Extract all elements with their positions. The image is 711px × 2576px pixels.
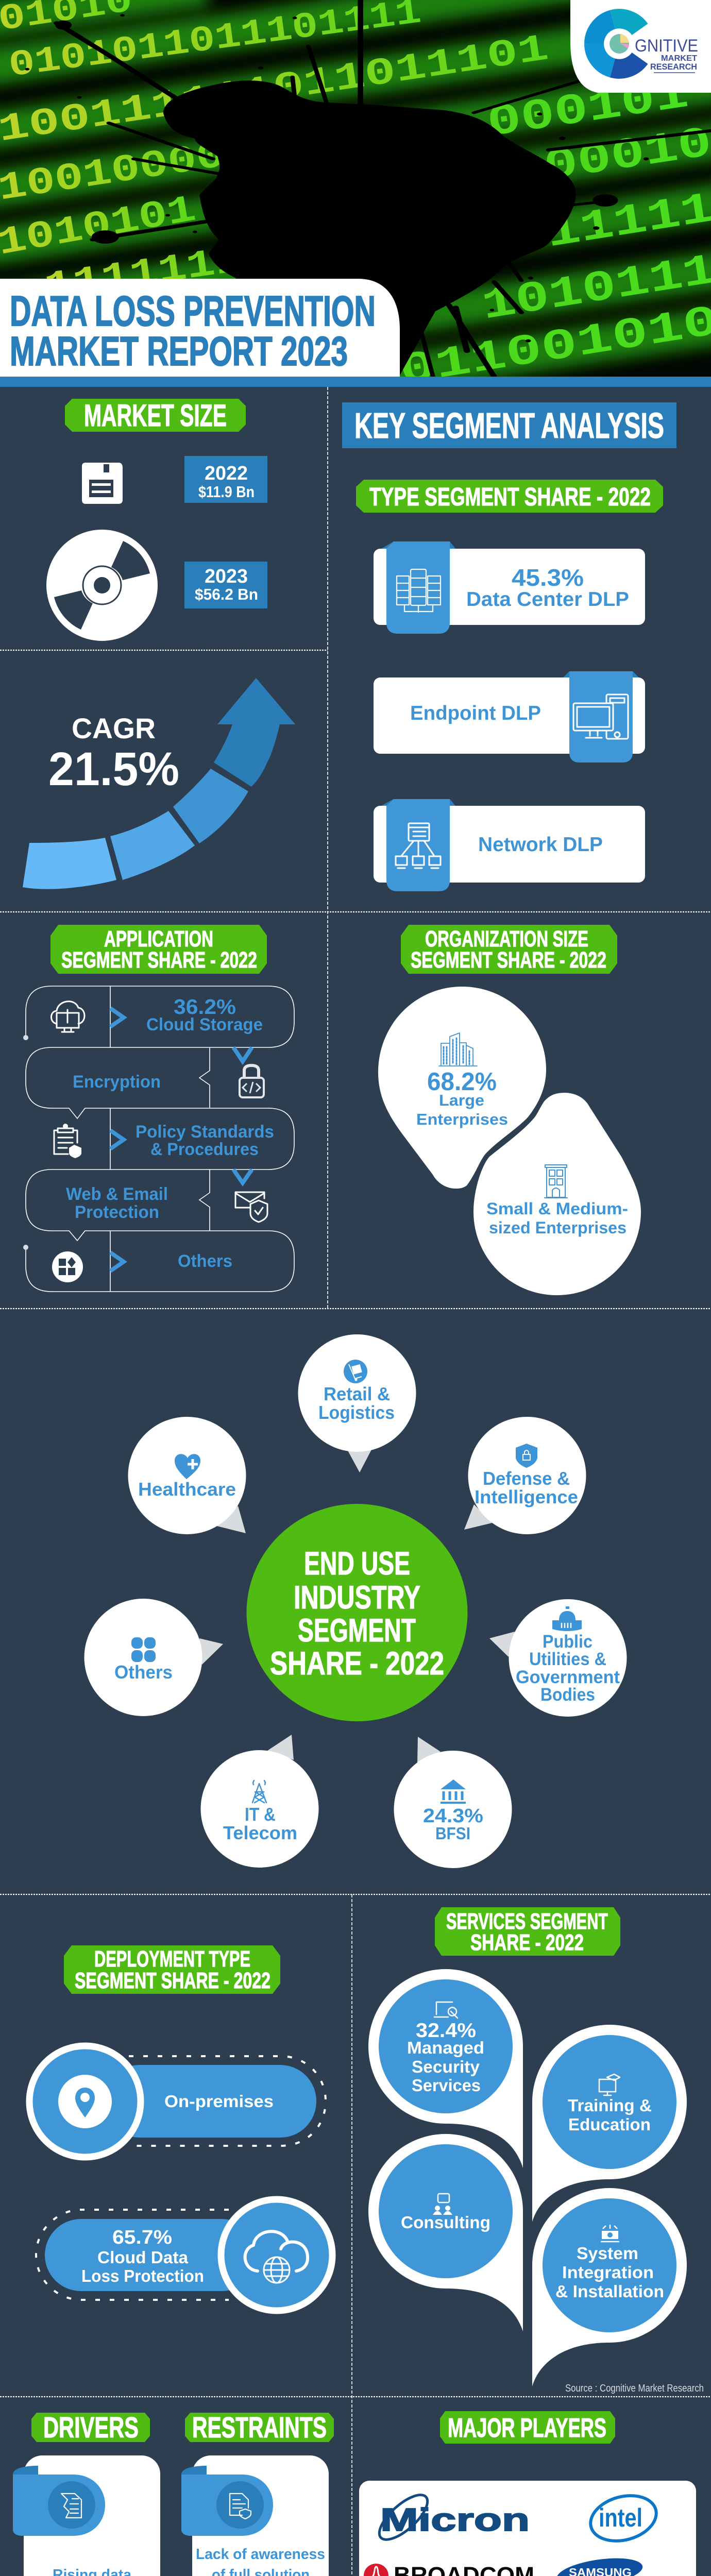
heading: application segment share xyxy=(50,925,267,974)
header image: binary code with black splatter: 100100001 xyxy=(0,130,256,211)
icon: cloud globe xyxy=(245,2231,308,2283)
icon: network tree xyxy=(396,823,441,868)
icon: desktop computer xyxy=(573,694,628,739)
teardrop: large enterprises: Enterprises xyxy=(416,1110,508,1128)
heading: drivers: DRIVERS xyxy=(43,2411,139,2444)
header image: binary code with black splatter: 000101 xyxy=(484,71,692,149)
header image: binary code with black splatter xyxy=(0,0,711,377)
heading: deployment type: SEGMENT SHARE - 2022 xyxy=(75,1968,270,1993)
icon: clover xyxy=(131,1637,156,1662)
panel: deployment type xyxy=(29,1945,332,2311)
bubble: retail and logistics xyxy=(298,1334,416,1472)
heading: organization size: SEGMENT SHARE - 2022 xyxy=(411,947,606,973)
panel: application segment xyxy=(23,925,294,1292)
icon: location pin xyxy=(58,2075,112,2128)
panel: CAGR xyxy=(23,678,295,889)
logo: Micron: Micron xyxy=(380,2502,530,2538)
card: data center DLP: Data Center DLP xyxy=(466,588,629,611)
heading: organization size: ORGANIZATION SIZE xyxy=(425,926,588,952)
panel: drivers xyxy=(13,2411,160,2576)
heading: major players xyxy=(440,2411,615,2444)
item: web and email protection: Protection xyxy=(75,1202,159,1222)
bubble: system integration and installation xyxy=(532,2188,687,2386)
icon: bank xyxy=(441,1780,466,1804)
bubble: training and education: Training & xyxy=(568,2096,652,2115)
card: data center DLP xyxy=(374,541,645,634)
icon: code lock xyxy=(240,1065,264,1097)
bubble: others: Others xyxy=(114,1662,173,1683)
pill: cloud data loss protection: Cloud Data xyxy=(97,2248,189,2267)
bubble: managed security services: Managed xyxy=(407,2038,484,2057)
panel: services segment xyxy=(368,1907,704,2394)
bubble: retail and logistics: Retail & xyxy=(324,1383,390,1404)
logo card xyxy=(359,2481,696,2576)
bubble: BFSI: BFSI xyxy=(435,1824,470,1843)
heading: application segment share: APPLICATION xyxy=(104,926,213,952)
icon: heart plus xyxy=(175,1454,200,1479)
center circle: end use industry xyxy=(246,1504,468,1721)
bubble: public utilities and government bodies: Government xyxy=(516,1667,620,1687)
card: restraints: Lack of awareness xyxy=(196,2546,325,2563)
icon: retail trolley xyxy=(344,1360,367,1383)
card: endpoint DLP xyxy=(374,671,645,762)
title block: MARKET REPORT 2023 xyxy=(10,328,348,374)
panel: key segment analysis xyxy=(342,402,676,891)
heading: services segment xyxy=(435,1907,620,1956)
icon: antenna tower xyxy=(252,1781,266,1803)
item: others xyxy=(52,1251,232,1282)
heading: major players: MAJOR PLAYERS xyxy=(448,2413,606,2443)
icon: cloud monitor xyxy=(52,1002,84,1032)
icon: compact disc xyxy=(46,530,158,641)
heading: services segment: SERVICES SEGMENT xyxy=(446,1909,608,1934)
teardrop: small and medium enterprises xyxy=(473,1093,641,1295)
item: policy standards: & Procedures xyxy=(150,1140,259,1159)
bubble: public utilities and government bodies: Public xyxy=(543,1632,592,1652)
blue strip xyxy=(0,377,711,387)
value: 2023: $56.2 Bn xyxy=(195,585,258,603)
pill: cloud data loss protection: 65.7% xyxy=(112,2227,172,2248)
bubble: BFSI xyxy=(394,1737,512,1868)
bubble: others xyxy=(84,1599,223,1716)
header image: binary code with black splatter: 1111111 xyxy=(42,239,246,310)
CAGR value: 21.5% xyxy=(48,743,179,795)
bubble: defense and intelligence: Intelligence xyxy=(475,1486,578,1507)
icon: small building xyxy=(545,1165,567,1198)
heading: application segment share: SEGMENT SHARE - 2022 xyxy=(61,947,257,973)
bubble: defense and intelligence xyxy=(464,1417,586,1534)
icon: clipboard shield xyxy=(54,1124,81,1158)
heading: organization size xyxy=(401,925,617,974)
heading: services segment: SHARE - 2022 xyxy=(470,1930,584,1955)
pill: cloud data loss protection: Loss Protection xyxy=(81,2266,204,2285)
CAGR value: CAGR xyxy=(72,712,156,744)
icon: ribbon secure document xyxy=(181,2466,273,2536)
bubble: managed security services: 32.4% xyxy=(416,2020,476,2042)
bubble: training and education xyxy=(532,2025,687,2222)
icon: data center xyxy=(397,569,441,612)
icon: app grid xyxy=(52,1251,83,1282)
title block xyxy=(0,279,400,377)
icon: capitol building xyxy=(552,1606,582,1631)
item: policy standards: Policy Standards xyxy=(136,1122,274,1142)
bubble: consulting xyxy=(368,2134,523,2331)
icon: consulting people xyxy=(433,2194,452,2215)
icon: gear system xyxy=(601,2225,619,2242)
bubble: managed security services xyxy=(368,1969,523,2168)
pill: on-premises: On-premises xyxy=(164,2092,274,2111)
item: cloud storage: Cloud Storage xyxy=(146,1015,263,1035)
logo card: GNITIVE xyxy=(635,36,698,56)
panel: organization size xyxy=(378,925,641,1295)
center circle: end use industry: SHARE - 2022 xyxy=(270,1646,444,1682)
center circle: end use industry: END USE xyxy=(304,1546,410,1582)
logo card: MARKET xyxy=(661,54,697,63)
logo: Intel xyxy=(585,2489,662,2548)
card: drivers xyxy=(13,2455,160,2576)
panel: end use industry xyxy=(84,1334,627,1868)
bubble: system integration and installation: & Installation xyxy=(555,2282,664,2301)
header image: binary code with black splatter: 1010101 xyxy=(0,189,199,266)
heading: deployment type xyxy=(64,1945,280,1994)
flow outline xyxy=(26,986,294,1292)
value: 2023 xyxy=(184,562,267,608)
card: network DLP xyxy=(374,799,645,891)
bubble: public utilities and government bodies: Bodies xyxy=(540,1685,595,1705)
CAGR value xyxy=(48,712,179,795)
icon: shield lock xyxy=(516,1444,537,1468)
item: cloud storage: 36.2% xyxy=(174,995,236,1019)
value: 2022: $11.9 Bn xyxy=(198,483,255,501)
arrow: rising growth xyxy=(23,678,295,889)
heading: restraints: RESTRAINTS xyxy=(192,2411,327,2444)
value: 2022 xyxy=(184,456,267,503)
icon: floppy disk xyxy=(82,463,123,504)
icon: mail shield xyxy=(235,1192,267,1222)
bubble: IT and telecom: IT & xyxy=(245,1804,276,1825)
bubble: system integration and installation: Integration xyxy=(562,2263,654,2282)
card: network DLP: Network DLP xyxy=(478,834,603,856)
bubble: managed security services: Services xyxy=(412,2076,481,2095)
center circle: end use industry: INDUSTRY xyxy=(294,1580,420,1616)
card: restraints xyxy=(181,2455,329,2576)
value: 2022: 2022 xyxy=(205,463,248,484)
item: others: Others xyxy=(178,1251,232,1271)
item: encryption xyxy=(73,1065,264,1097)
header image: binary code with black splatter: 100111111011011101 xyxy=(0,28,551,152)
bubble: IT and telecom: Telecom xyxy=(223,1822,297,1843)
bubble: consulting: Consulting xyxy=(401,2213,490,2232)
pill: cloud data loss protection xyxy=(36,2199,332,2311)
logo card xyxy=(570,0,711,93)
logo card: RESEARCH xyxy=(650,62,697,72)
teardrop: small and medium enterprises: Small & Medium- xyxy=(486,1199,628,1218)
item: encryption: Encryption xyxy=(73,1072,161,1092)
icon: ribbon torn document xyxy=(13,2466,105,2536)
panel: restraints xyxy=(181,2411,334,2576)
card: endpoint DLP: Endpoint DLP xyxy=(410,702,541,724)
black splatter xyxy=(25,0,711,377)
card: data center DLP: 45.3% xyxy=(512,564,584,591)
logo: Micron xyxy=(373,2488,530,2547)
flow connectors xyxy=(23,1008,252,1271)
bubble: BFSI: 24.3% xyxy=(423,1805,483,1827)
icon: training screen xyxy=(599,2074,620,2095)
pill: on-premises xyxy=(29,2046,326,2157)
panel: market size xyxy=(46,398,267,641)
heading: market size: MARKET SIZE xyxy=(84,398,227,433)
bubble: managed security services: Security xyxy=(412,2057,480,2076)
value: 2023: 2023 xyxy=(205,566,248,587)
bubble: defense and intelligence: Defense & xyxy=(483,1468,570,1489)
teardrop: large enterprises: Large xyxy=(439,1091,484,1109)
item: policy standards xyxy=(54,1122,274,1159)
logo: Samsung Electronics xyxy=(555,2554,691,2576)
bubble: system integration and installation: System xyxy=(577,2244,638,2263)
item: cloud storage xyxy=(52,995,263,1035)
logo: Intel: intel xyxy=(599,2503,642,2532)
item: web and email protection xyxy=(66,1184,267,1222)
bubble: healthcare: Healthcare xyxy=(138,1479,236,1500)
item: web and email protection: Web & Email xyxy=(66,1184,168,1204)
bubble: healthcare xyxy=(128,1417,246,1534)
bubble: public utilities and government bodies xyxy=(489,1599,627,1717)
panel: major players xyxy=(359,2411,697,2576)
center circle: end use industry: SEGMENT xyxy=(298,1613,416,1649)
bubble: training and education: Education xyxy=(568,2115,651,2134)
heading: deployment type: DEPLOYMENT TYPE xyxy=(94,1946,250,1972)
bubble: IT and telecom xyxy=(201,1735,318,1868)
teardrop: large enterprises xyxy=(378,987,546,1189)
icon: laptop search xyxy=(434,2002,458,2018)
bubble: public utilities and government bodies: Utilities & xyxy=(529,1649,606,1669)
title block: DATA LOSS PREVENTION xyxy=(10,287,376,335)
bubble: retail and logistics: Logistics xyxy=(318,1402,395,1423)
icon: office buildings xyxy=(439,1033,477,1066)
teardrop: small and medium enterprises: sized Enterprises xyxy=(489,1218,627,1237)
teardrop: large enterprises: 68.2% xyxy=(427,1068,497,1096)
